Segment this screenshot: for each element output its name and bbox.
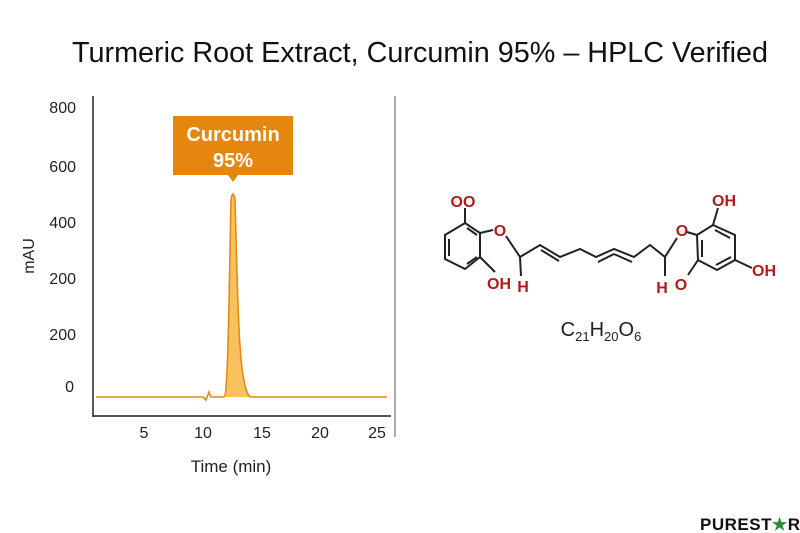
x-axis title: Time (min) xyxy=(191,457,271,476)
formula: 6 xyxy=(634,329,641,344)
molecule atom labels: OH xyxy=(487,276,511,293)
y-axis labels: 200 xyxy=(49,271,76,288)
x-axis labels: 10 xyxy=(194,425,212,442)
molecule atom labels: OH xyxy=(712,193,736,210)
x-axis labels: 20 xyxy=(311,425,329,442)
y-axis labels: 0 xyxy=(65,379,74,396)
callout xyxy=(173,116,293,182)
molecule atom labels xyxy=(451,193,776,297)
y-axis labels: 200 xyxy=(49,327,76,344)
formula: 21 xyxy=(575,329,590,344)
molecule atom labels: O xyxy=(494,223,506,240)
y-axis labels: 600 xyxy=(49,159,76,176)
callout: 95% xyxy=(213,150,253,172)
formula: 20 xyxy=(604,329,619,344)
x-axis labels: 15 xyxy=(253,425,271,442)
x-axis labels: 25 xyxy=(368,425,386,442)
molecule structure xyxy=(445,208,752,276)
molecule atom labels: H xyxy=(517,279,529,296)
y-axis labels: 800 xyxy=(49,100,76,117)
molecule atom labels: O xyxy=(676,223,688,240)
callout: Curcumin xyxy=(186,124,280,146)
formula: H xyxy=(590,319,604,341)
y-axis title: mAU xyxy=(21,238,38,274)
trace xyxy=(96,194,387,400)
formula: C xyxy=(561,319,575,341)
chart: HPLC chromatogram xyxy=(21,96,395,476)
x-axis labels: 5 xyxy=(140,425,149,442)
x-axis labels xyxy=(140,425,386,442)
molecule atom labels: OO xyxy=(451,194,475,211)
peak fill xyxy=(224,194,251,397)
formula: O xyxy=(619,319,634,341)
y-axis labels xyxy=(49,100,76,396)
molecule atom labels: OH xyxy=(752,263,776,280)
molecule atom labels: H xyxy=(656,280,668,297)
y-axis labels: 400 xyxy=(49,215,76,232)
title: Turmeric Root Extract, Curcumin 95% – HPLC Verified xyxy=(72,37,768,69)
molecule atom labels: O xyxy=(675,277,687,294)
